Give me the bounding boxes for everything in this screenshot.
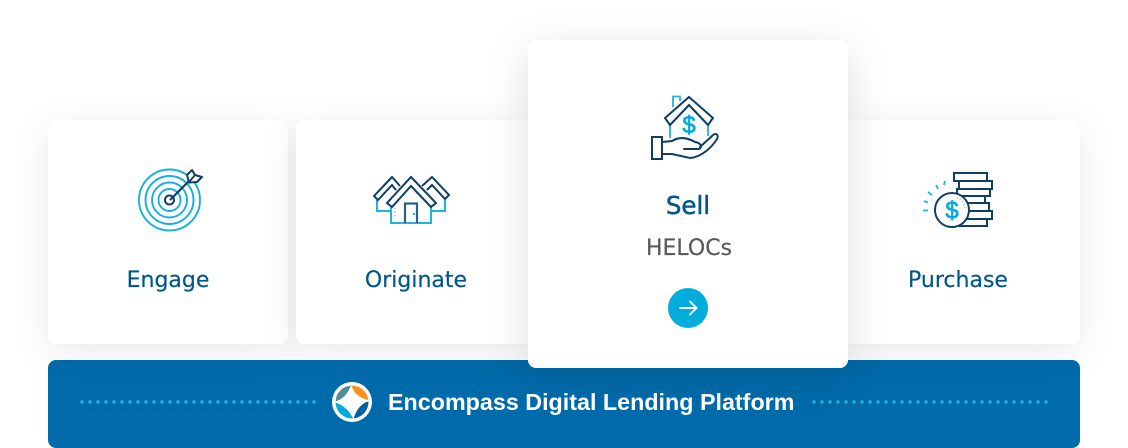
panel: purchase bbox=[840, 120, 1080, 344]
icon: arrow button bbox=[668, 288, 708, 328]
icon: house in hand: $ bbox=[682, 112, 696, 139]
panel: platform bar bbox=[48, 360, 1080, 448]
text: helocs: HELOCs bbox=[646, 236, 732, 261]
heading: sell: Sell bbox=[666, 191, 710, 220]
panel: originate bbox=[296, 120, 536, 344]
panel: sell bbox=[528, 40, 848, 368]
icon: coins: $ bbox=[945, 198, 959, 224]
icon: houses bbox=[374, 177, 449, 223]
label: engage: Engage bbox=[127, 268, 209, 293]
icon: house in hand bbox=[652, 96, 718, 159]
dotted line left bbox=[82, 400, 315, 404]
dotted line right bbox=[814, 400, 1048, 404]
label: purchase: Purchase bbox=[908, 268, 1008, 293]
icon: target bbox=[139, 170, 202, 230]
label: originate: Originate bbox=[365, 268, 467, 293]
panel: engage bbox=[48, 120, 288, 344]
platform title: Encompass Digital Lending Platform bbox=[388, 389, 794, 415]
icon: coins bbox=[923, 173, 992, 227]
icon: encompass logo bbox=[332, 382, 372, 422]
